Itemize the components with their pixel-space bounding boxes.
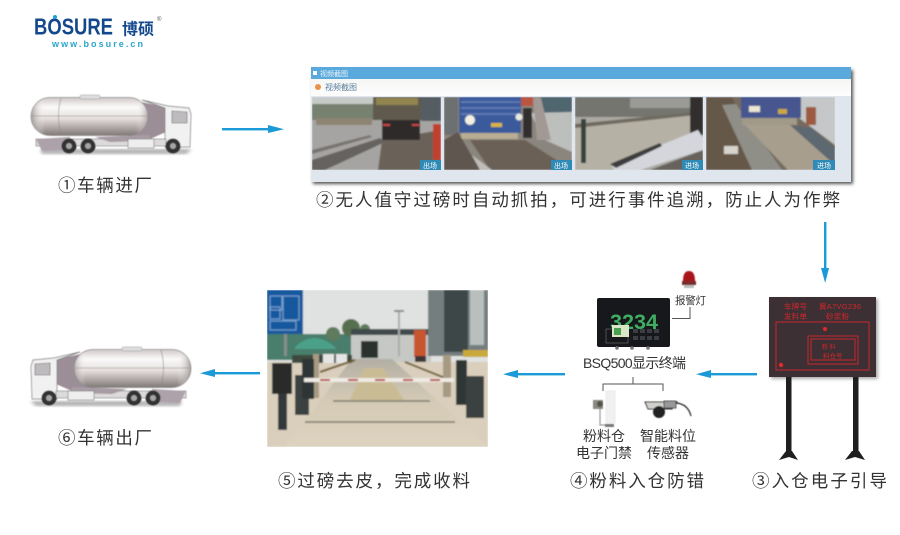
sign LED content: 粉 料 — [822, 343, 836, 351]
parked cars — [292, 355, 352, 363]
device: BSQ500 display terminal — [597, 298, 670, 350]
logo: BOSURE — [34, 14, 113, 40]
connector: terminal to alarm — [672, 307, 690, 318]
blue site map board — [267, 290, 303, 334]
sign LED content — [776, 301, 869, 370]
arrow: 1 to 2 — [222, 125, 284, 133]
photo: front of blue truck — [444, 97, 572, 170]
icon: truck entering — [31, 95, 192, 154]
sign posts — [779, 377, 865, 460]
terminal label: BSQ500显示终端 — [583, 355, 686, 371]
peripheral labels: silo door — [576, 428, 632, 461]
sign LED content: 车牌号 — [784, 301, 807, 311]
icon: truck leaving — [30, 347, 191, 406]
icon: alarm light — [682, 271, 696, 288]
sign LED content: 发料单 — [784, 311, 808, 321]
step 3 label: ③入仓电子引导 — [752, 471, 887, 491]
logo: 博硕 — [122, 20, 154, 38]
device: BSQ500 display terminal: 3234 — [610, 311, 658, 334]
ticket terminal — [272, 363, 292, 394]
peripheral labels: level sensor: 智能料位 — [640, 428, 696, 444]
panel header bar: 视频截图 — [320, 69, 348, 78]
logo — [34, 14, 162, 49]
photo: front of blue truck: 出场 — [554, 161, 568, 170]
barrier arm — [304, 378, 454, 382]
buildings and trees — [267, 334, 352, 360]
sign LED content: 砂浆粉 — [826, 311, 850, 321]
peripheral labels: level sensor: 传感器 — [647, 445, 689, 461]
right tower — [428, 290, 488, 356]
photo: weighbridge gate — [267, 290, 488, 447]
icon: silo door controller — [593, 391, 615, 427]
photo: weighbridge edge: 进场 — [685, 161, 699, 170]
peripheral labels: silo door: 粉料仓 — [583, 428, 625, 444]
arrow: 2 to 3 — [821, 222, 829, 283]
step 6 label: ⑥车辆出厂 — [58, 428, 152, 448]
photo: weighbridge edge — [575, 97, 703, 170]
sign board — [769, 297, 876, 377]
photo: rear of truck — [312, 97, 441, 170]
photo: rear of truck: 出场 — [423, 161, 437, 170]
gate posts — [313, 354, 319, 398]
panel subheader: 视频截图 — [325, 82, 357, 92]
photo: truck approaching: 进场 — [817, 161, 831, 170]
guard rails — [320, 360, 450, 380]
step 5 label: ⑤过磅去皮，完成收料 — [278, 471, 470, 491]
arrow: 5 to 6 — [200, 369, 260, 377]
panel: video capture screenshot — [311, 67, 853, 184]
panel subheader — [311, 79, 851, 96]
icon: level sensor — [645, 401, 691, 418]
step 2 label: ②无人值守过磅时自动抓拍，可进行事件追溯，防止人为作弊 — [316, 190, 840, 210]
ground and road — [267, 362, 488, 447]
step 4 label: ④粉料入仓防错 — [570, 471, 704, 491]
connector: terminal to peripherals — [603, 377, 663, 391]
sign LED content: 料仓号 — [823, 351, 843, 360]
panel header bar — [311, 67, 851, 79]
sign LED content: 冀A7VG236 — [819, 301, 861, 311]
peripheral labels: level sensor — [640, 428, 696, 461]
logo: ® — [157, 16, 162, 23]
peripheral labels: silo door: 电子门禁 — [576, 445, 632, 461]
logo: www.bosure.cn — [51, 39, 143, 49]
alarm label: 报警灯 — [675, 294, 706, 307]
photo: truck approaching — [706, 97, 835, 170]
arrow: 4 to 5 — [503, 370, 565, 378]
panel: warehouse guidance sign — [769, 297, 878, 460]
arrow: 3 to 4 — [696, 370, 757, 378]
step 1 label: ①车辆进厂 — [58, 176, 152, 196]
